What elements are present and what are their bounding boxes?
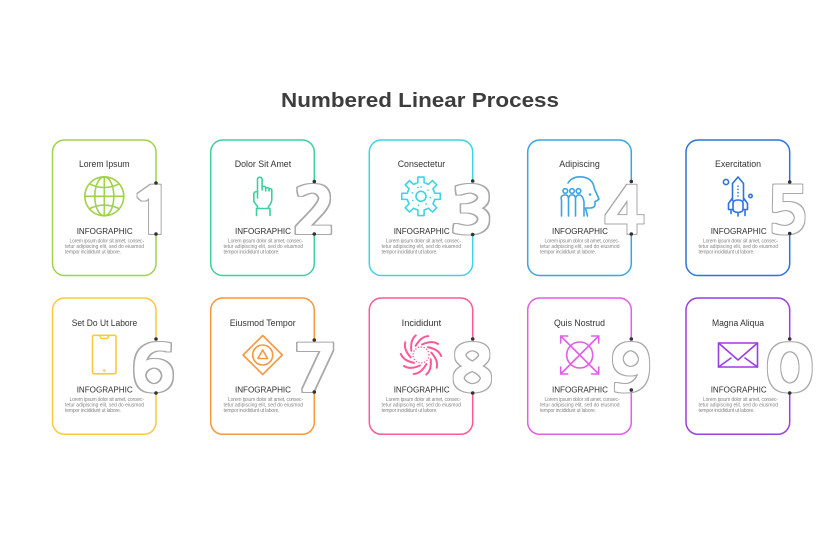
card outline 1 xyxy=(52,140,156,276)
label 2: INFOGRAPHIC xyxy=(235,227,291,236)
body text 6 xyxy=(65,397,144,414)
body text 3: tempor incididunt ut labore. xyxy=(382,250,438,256)
body text 9: Lorem ipsum dolor sit amet, consec- xyxy=(544,397,620,403)
body text 10: Lorem ipsum dolor sit amet, consec- xyxy=(703,397,778,403)
body text 1: tempor incididunt ut labore. xyxy=(65,250,121,256)
heading 4: Adipiscing xyxy=(559,159,600,169)
panel: step 2 Dolor Sit Amet xyxy=(211,140,336,276)
label 7: INFOGRAPHIC xyxy=(235,386,291,395)
heading 10: Magna Aliqua xyxy=(712,318,764,328)
body text 2: tetur adipiscing elit, sed do eiusmod xyxy=(224,244,303,250)
body text 7 xyxy=(224,397,303,414)
body text 7: tetur adipiscing elit, sed do eiusmod xyxy=(224,403,303,409)
number 5: 5 xyxy=(767,180,808,243)
icon: pointing hand xyxy=(254,177,272,216)
body text 4: tempor incididunt ut labore. xyxy=(540,250,596,256)
label 10: INFOGRAPHIC xyxy=(711,386,767,395)
body text 8 xyxy=(382,397,461,414)
connector dots 10 xyxy=(788,337,792,395)
card outline 10 xyxy=(686,298,790,434)
panel: step 8 Incididunt xyxy=(369,298,493,434)
card outline 9 xyxy=(528,298,631,434)
body text 8: tetur adipiscing elit, sed do eiusmod xyxy=(382,403,461,409)
body text 7: tempor incididunt ut labore. xyxy=(224,408,280,414)
body text 1 xyxy=(65,238,144,256)
number 4: 4 xyxy=(605,181,644,243)
panel: step 1 Lorem Ipsum xyxy=(52,140,177,276)
body text 2: tempor incididunt ut labore. xyxy=(224,250,280,256)
card outline 8 xyxy=(369,298,473,434)
icon: globe xyxy=(85,177,124,216)
number 7: 7 xyxy=(294,339,337,400)
icon: arrows and circle xyxy=(561,336,599,374)
body text 7: Lorem ipsum dolor sit amet, consec- xyxy=(228,397,303,403)
icon: diamond with triangle xyxy=(243,336,282,374)
panel: step 9 Quis Nostrud xyxy=(528,298,652,434)
body text 6: Lorem ipsum dolor sit amet, consec- xyxy=(70,397,144,403)
body text 4: tetur adipiscing elit, sed do eiusmod xyxy=(540,244,620,250)
icon: gear xyxy=(402,177,440,216)
body text 2 xyxy=(224,238,303,256)
card outline 6 xyxy=(52,298,156,434)
panel: step 10 Magna Aliqua xyxy=(686,298,814,434)
heading 3: Consectetur xyxy=(398,159,445,169)
body text 10 xyxy=(698,397,778,414)
card outline 7 xyxy=(211,298,314,434)
connector dots 6 xyxy=(154,337,158,395)
panel: step 5 Exercitation xyxy=(686,140,808,276)
body text 3: tetur adipiscing elit, sed do eiusmod xyxy=(382,244,461,250)
panel: step 7 Eiusmod Tempor xyxy=(211,298,337,434)
connector dots 4 xyxy=(630,180,633,236)
label 6: INFOGRAPHIC xyxy=(77,386,133,395)
title: Numbered Linear Process xyxy=(281,90,559,112)
number 8: 8 xyxy=(451,339,493,400)
body text 2: Lorem ipsum dolor sit amet, consec- xyxy=(228,238,303,244)
connector dots 8 xyxy=(471,337,475,395)
body text 4 xyxy=(540,238,620,256)
icon: envelope xyxy=(718,343,758,367)
number 2: 2 xyxy=(293,181,336,242)
connector dots 7 xyxy=(312,338,316,394)
connector dots 3 xyxy=(471,179,475,236)
card outline 5 xyxy=(686,140,790,276)
body text 5: tetur adipiscing elit, sed do eiusmod xyxy=(698,244,778,250)
icon: swirl xyxy=(400,335,442,375)
body text 9: tetur adipiscing elit, sed do eiusmod xyxy=(540,403,620,409)
label 3: INFOGRAPHIC xyxy=(394,227,450,236)
body text 3 xyxy=(382,238,461,256)
heading 7: Eiusmod Tempor xyxy=(230,318,296,328)
label 1: INFOGRAPHIC xyxy=(77,227,133,236)
body text 10: tempor incididunt ut labore. xyxy=(698,408,754,414)
number 3: 3 xyxy=(450,181,494,242)
body text 10: tetur adipiscing elit, sed do eiusmod xyxy=(698,403,778,409)
number 0: 0 xyxy=(765,339,814,400)
body text 3: Lorem ipsum dolor sit amet, consec- xyxy=(386,238,461,244)
body text 9 xyxy=(540,397,620,414)
body text 5 xyxy=(698,238,778,256)
body text 1: tetur adipiscing elit, sed do eiusmod xyxy=(65,244,144,250)
body text 6: tempor incididunt ut labore. xyxy=(65,408,121,414)
body text 8: Lorem ipsum dolor sit amet, consec- xyxy=(386,397,461,403)
label 5: INFOGRAPHIC xyxy=(711,227,767,236)
body text 4: Lorem ipsum dolor sit amet, consec- xyxy=(544,238,620,244)
card outline 2 xyxy=(211,140,314,276)
label 9: INFOGRAPHIC xyxy=(552,386,608,395)
icon: smartphone xyxy=(92,335,116,374)
icon: heads group xyxy=(561,177,599,216)
connector dots 9 xyxy=(630,337,633,392)
connector dots 1 xyxy=(154,181,158,236)
label 4: INFOGRAPHIC xyxy=(552,227,608,236)
connector dots 5 xyxy=(788,180,792,235)
card outline 3 xyxy=(369,140,473,276)
body text 8: tempor incididunt ut labore. xyxy=(382,408,438,414)
panel: step 6 Set Do Ut Labore xyxy=(52,298,175,434)
heading 1: Lorem Ipsum xyxy=(79,159,130,169)
panel: step 3 Consectetur xyxy=(369,140,494,276)
body text 9: tempor incididunt ut labore. xyxy=(540,408,596,414)
heading 6: Set Do Ut Labore xyxy=(72,318,137,328)
heading 2: Dolor Sit Amet xyxy=(235,159,292,169)
connector dots 2 xyxy=(312,180,316,236)
body text 5: tempor incididunt ut labore. xyxy=(698,250,754,256)
body text 1: Lorem ipsum dolor sit amet, consec- xyxy=(70,238,144,244)
heading 8: Incididunt xyxy=(402,318,442,328)
number 6: 6 xyxy=(131,340,175,401)
number 1: 1 xyxy=(129,181,177,242)
heading 5: Exercitation xyxy=(715,159,761,169)
heading 9: Quis Nostrud xyxy=(554,318,605,328)
body text 5: Lorem ipsum dolor sit amet, consec- xyxy=(703,238,778,244)
card outline 4 xyxy=(528,140,631,276)
number 9: 9 xyxy=(610,339,652,400)
body text 6: tetur adipiscing elit, sed do eiusmod xyxy=(65,403,144,409)
icon: rocket xyxy=(723,177,752,216)
panel: step 4 Adipiscing xyxy=(528,140,644,276)
label 8: INFOGRAPHIC xyxy=(394,386,450,395)
